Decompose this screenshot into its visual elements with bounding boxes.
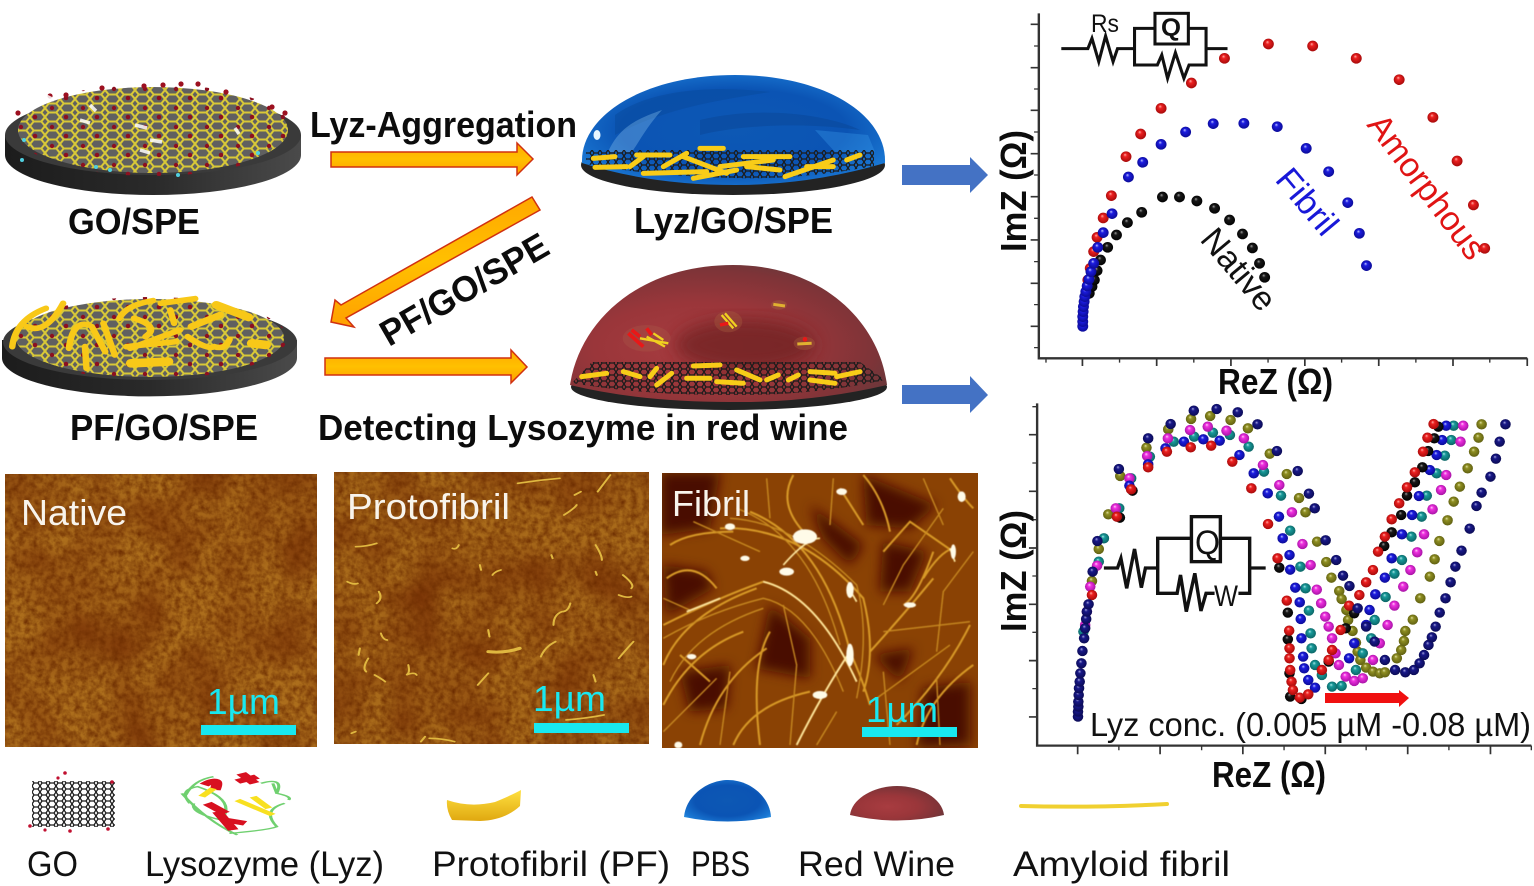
axis label: ReZ: ReZ (Ω)	[1218, 361, 1333, 402]
legend label: GO: GO	[27, 845, 78, 884]
AFM panel: Protofibril	[334, 472, 649, 744]
legend label: Lysozyme: Lysozyme (Lyz)	[145, 845, 384, 884]
label: GO/SPE: GO/SPE	[68, 201, 200, 242]
label: Detecting Lysozyme in red wine: Detecting Lysozyme in red wine	[318, 407, 848, 448]
data series: magenta	[1080, 420, 1468, 686]
circuit diagram: Rs and Q	[1061, 10, 1228, 78]
arrow: Lyz aggregation	[331, 143, 533, 175]
data series: Amorphous	[1082, 39, 1490, 285]
chart: Nyquist plot with Lyz concentration series	[993, 403, 1531, 795]
data series: red and black	[1087, 419, 1444, 704]
arrow: blue to upper chart	[902, 157, 988, 193]
circuit diagram: Q and W: Q	[1195, 524, 1220, 562]
axis label: ImZ: ImZ (Ω)	[993, 510, 1034, 632]
label: rotated PF/GO/SPE: PF/GO/SPE	[372, 224, 556, 354]
scale bar: 1µm: 1µm	[866, 689, 938, 730]
label: Amorphous: Amorphous	[1360, 107, 1493, 267]
data series: teal	[1078, 420, 1459, 692]
lysozyme clusters in wine	[623, 300, 815, 352]
circuit diagram: Q and W: W	[1214, 580, 1239, 613]
dome: red wine detection	[570, 265, 887, 410]
scale bar: 1µm	[862, 689, 957, 737]
disc: PF/GO/SPE electrode	[2, 297, 297, 396]
protofibril rods	[12, 299, 266, 368]
label: Protofibril: Protofibril	[347, 486, 510, 527]
scale bar: 1µm	[533, 678, 629, 733]
circuit diagram: Q and W	[1104, 517, 1266, 613]
data series: Fibril	[1077, 118, 1372, 332]
legend label: Red Wine: Red Wine	[798, 845, 955, 884]
icon: red wine drop	[850, 786, 944, 820]
circuit diagram: Rs and Q: Rs	[1091, 10, 1119, 38]
icon: lysozyme structure	[182, 773, 289, 835]
data series: navy	[1073, 404, 1511, 722]
scale bar: 1µm	[201, 681, 296, 735]
legend label: Amyloid fibril: Amyloid fibril	[1013, 845, 1230, 884]
label: Fibril: Fibril	[1268, 161, 1346, 243]
axes	[1031, 13, 1527, 366]
AFM panel: Fibril	[660, 472, 978, 748]
label: Native: Native	[21, 492, 127, 533]
arrow: increasing concentration	[1325, 690, 1409, 707]
icon: PBS drop	[684, 780, 771, 822]
AFM panel: Native	[5, 474, 317, 747]
protofibril specks	[347, 475, 633, 742]
data series: olive	[1087, 411, 1487, 678]
arrow: back to PF/GO/SPE	[331, 197, 540, 327]
label: Lyz-Aggregation: Lyz-Aggregation	[310, 104, 577, 145]
disc: GO/SPE electrode	[5, 81, 301, 195]
icon: GO sheet	[28, 771, 115, 833]
icon: amyloid fibril	[1021, 804, 1167, 807]
dome: Lyz/GO/SPE in PBS	[581, 75, 885, 195]
legend label: PBS: PBS	[691, 845, 750, 884]
legend label: Protofibril: Protofibril (PF)	[432, 845, 670, 884]
label: Lyz concentration range: Lyz conc. (0.005 µM -0.08 µM)	[1090, 706, 1531, 743]
scale bar: 1µm: 1µm	[533, 678, 606, 719]
label: Lyz/GO/SPE: Lyz/GO/SPE	[634, 200, 833, 241]
axis label: ImZ: ImZ (Ω)	[993, 130, 1034, 252]
data series: blue	[1124, 420, 1451, 693]
axes	[1029, 403, 1531, 754]
axis label: ReZ: ReZ (Ω)	[1212, 754, 1326, 795]
chart: Nyquist plot of Native, Fibril, Amorphous	[993, 10, 1527, 402]
edge atoms and highlights	[15, 81, 288, 177]
icon: protofibril	[447, 790, 521, 821]
scale bar: 1µm: 1µm	[207, 681, 280, 722]
label: PF/GO/SPE: PF/GO/SPE	[70, 407, 258, 448]
label: Native: Native	[1193, 221, 1284, 319]
arrow: blue to lower chart	[902, 376, 988, 413]
label: Fibril: Fibril	[672, 483, 750, 524]
legend	[27, 771, 1230, 884]
data series: Native	[1084, 192, 1270, 299]
arrow: detection step	[325, 350, 527, 383]
circuit diagram: Rs and Q: Q	[1161, 14, 1181, 42]
